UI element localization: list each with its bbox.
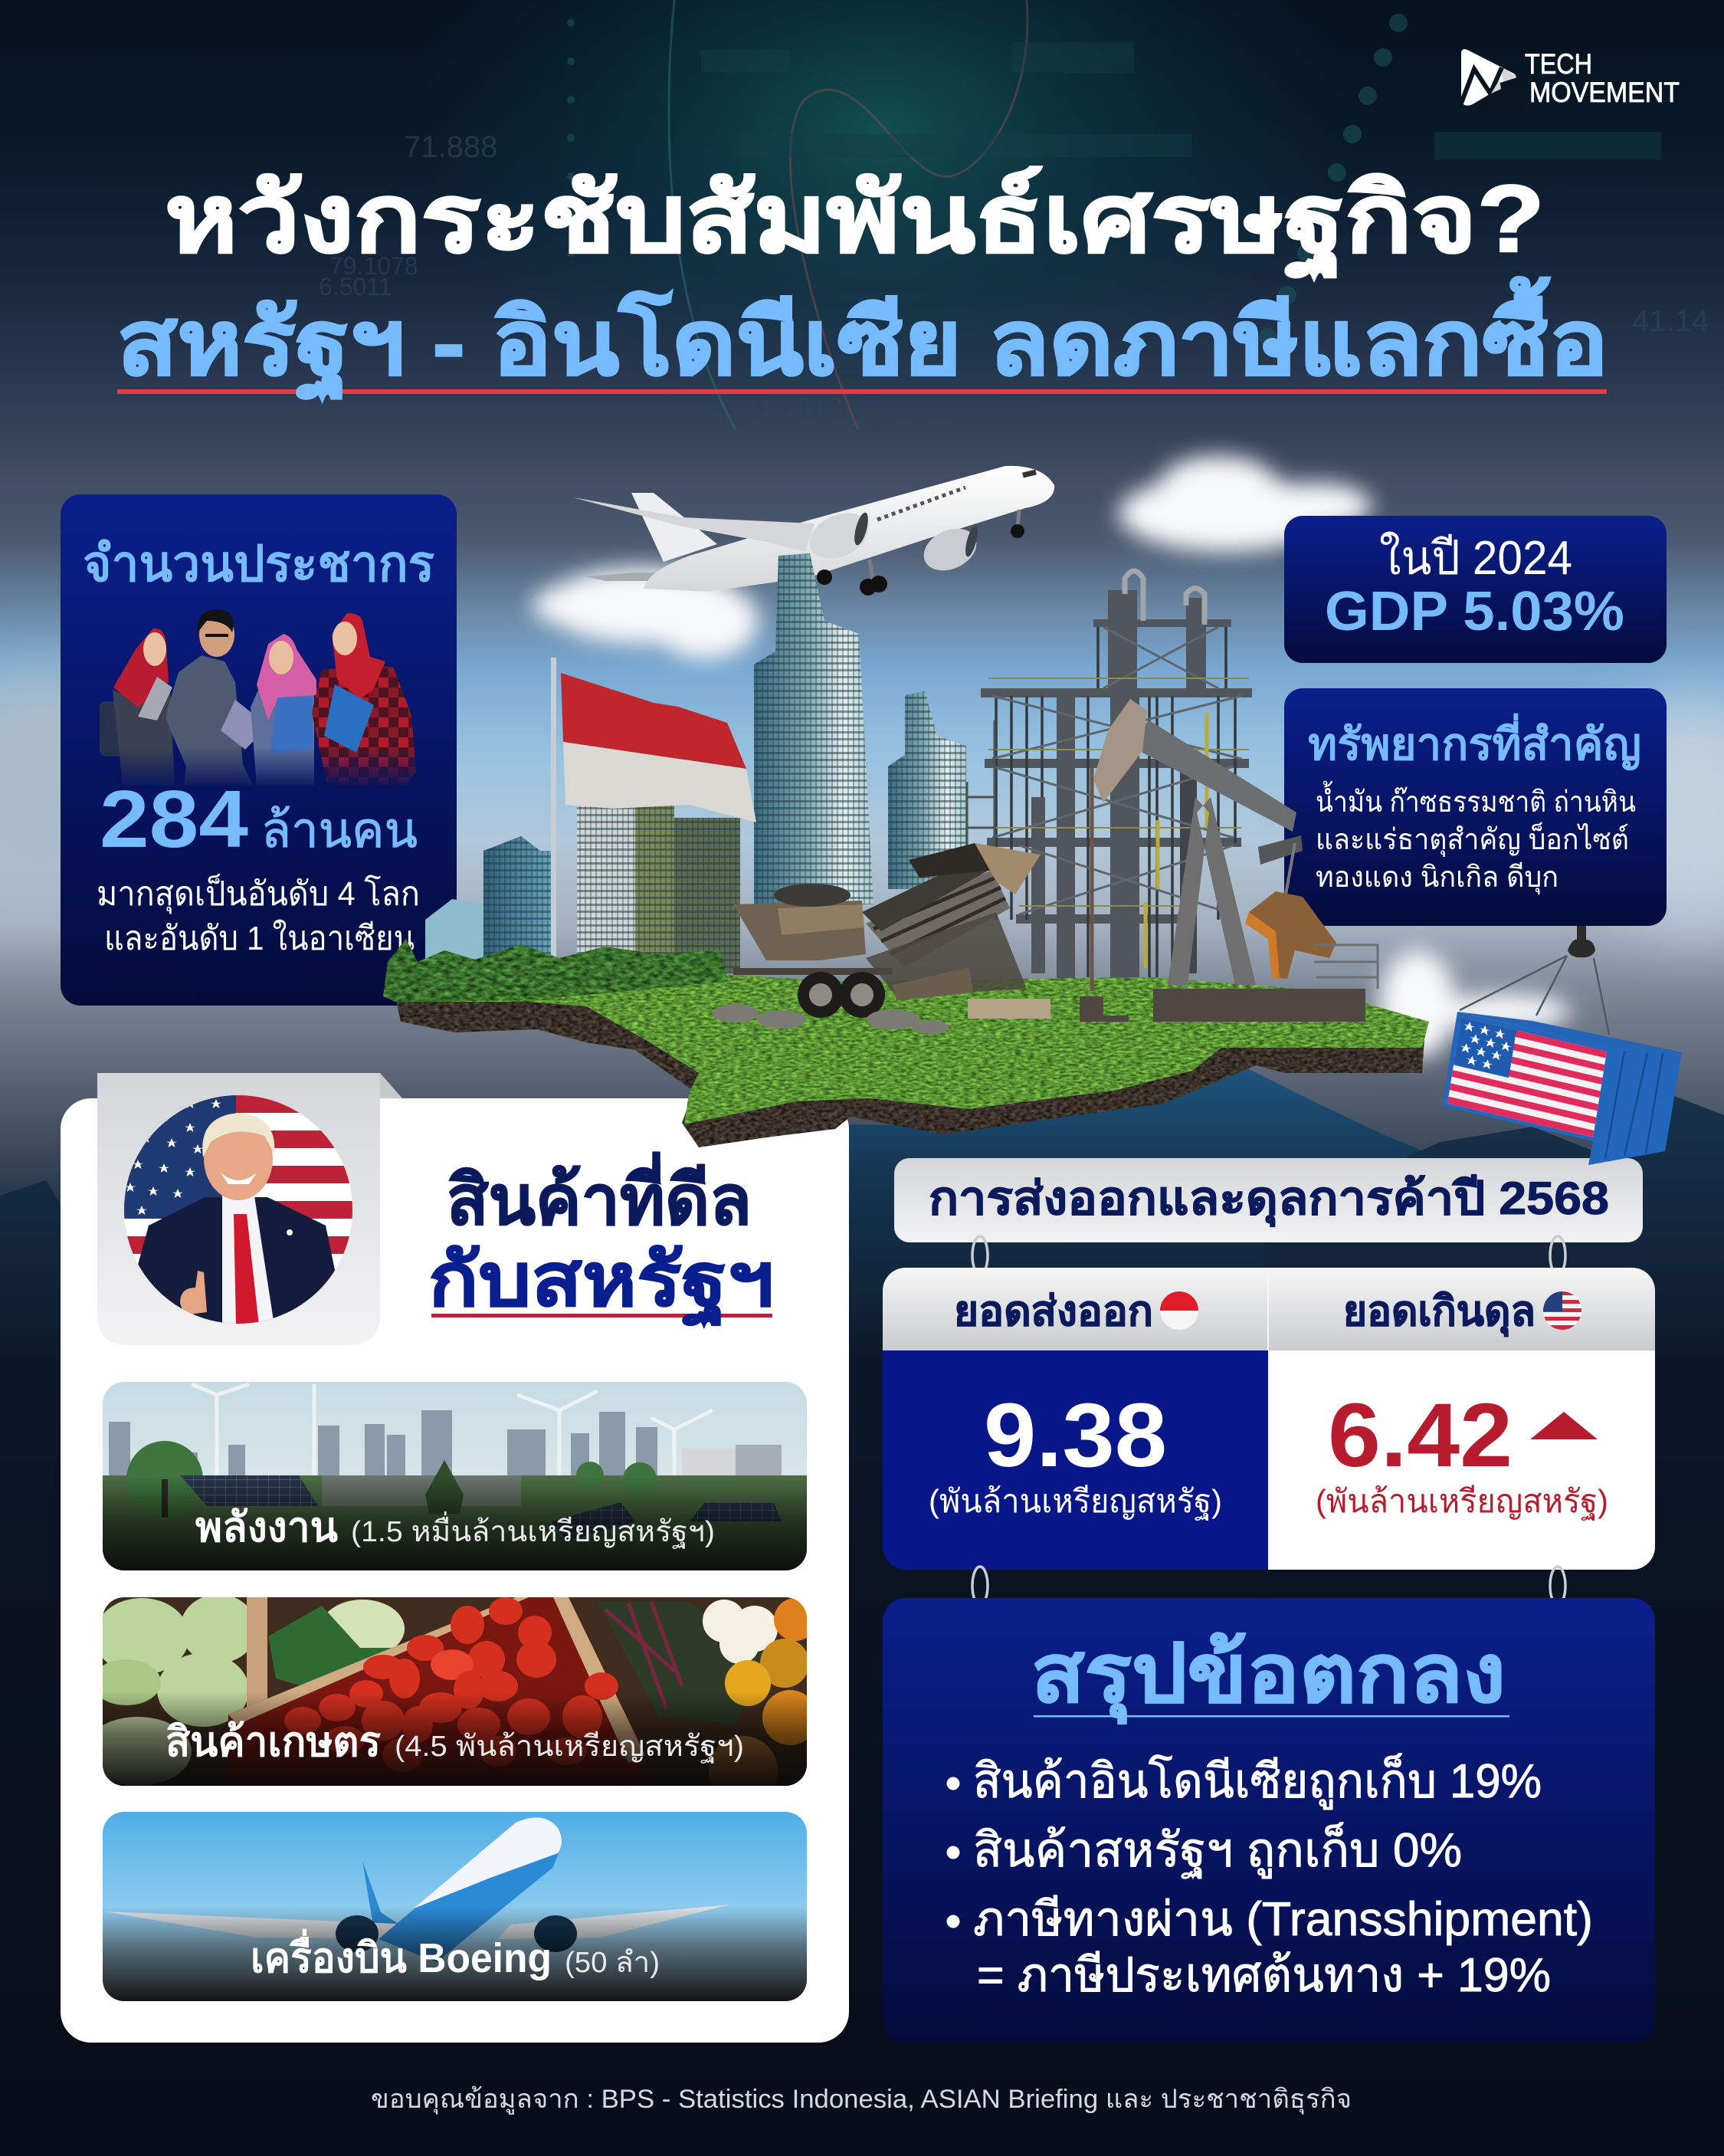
logo: Tech Movement: MOVEMENT [1529, 77, 1680, 108]
card: Boeing aircraft [103, 1812, 807, 2001]
column: trade surplus [1316, 1288, 1608, 1521]
logo: Tech Movement [1460, 48, 1680, 111]
heading: population: จำนวนประชากร [83, 535, 434, 592]
panel: export and trade balance header: การส่งออกและดุลการค้าปี 2568 [929, 1173, 1609, 1227]
panel: key resources: ทรัพยากรที่สำคัญ [1308, 713, 1641, 770]
heading: deal products [428, 1152, 774, 1328]
headline line 2: สหรัฐฯ - อินโดนีเซีย ลดภาษีแลกซื้อ [117, 277, 1608, 402]
panel: key resources: ทองแดง นิกเกิล ดีบุก [1316, 861, 1558, 894]
description: มากสุดเป็นอันดับ 4 โลก [97, 874, 420, 914]
card: Boeing aircraft: เครื่องบิน Boeing [251, 1928, 552, 1981]
card: agricultural products: สินค้าเกษตร [166, 1719, 381, 1765]
portrait: flag and figure [124, 1095, 352, 1326]
background: sky, glow and mountains: 6.5011 [319, 273, 392, 300]
stat: 284 million people: 284 [100, 774, 248, 865]
panel: deal products [61, 1073, 849, 2043]
hanging hooks [972, 1236, 1565, 1275]
background: sky, glow and mountains: 71.888 [404, 130, 497, 164]
crane hook [1568, 926, 1595, 957]
description: และอันดับ 1 ในอาเซียน [104, 919, 415, 957]
panel: export and trade balance header [894, 1158, 1643, 1242]
card: agricultural products: (4.5 พันล้านเหรียญสหรัฐฯ) [395, 1731, 744, 1764]
background: sky, glow and mountains: 41.14 [1632, 304, 1709, 338]
logo: Tech Movement: TECH [1525, 48, 1592, 80]
panel: key resources: น้ำมัน ก๊าซธรรมชาติ ถ่านหิน [1316, 780, 1636, 819]
portrait tab [97, 1073, 402, 1345]
column: exports: 9.38 [984, 1385, 1167, 1486]
heading: deal products: สินค้าที่ดีล [447, 1152, 752, 1239]
mining truck [713, 843, 1050, 1034]
panel: GDP: GDP 5.03% [1325, 581, 1624, 642]
heading: deal summary: สรุปข้อตกลง [1031, 1629, 1506, 1724]
card: energy: พลังงาน [195, 1505, 338, 1551]
icon: US flag [1543, 1291, 1581, 1330]
illustration: Indonesian city, industry and island [383, 466, 1682, 1165]
stat: 284 million people [100, 774, 418, 865]
bullet list: ภาษีทางผ่าน (Transshipment) [973, 1893, 1593, 1946]
panel: key resources [1284, 688, 1667, 926]
heading: deal products: กับสหรัฐฯ [428, 1239, 774, 1328]
arrow: up [1530, 1412, 1598, 1439]
column: exports [929, 1288, 1222, 1521]
description [97, 874, 420, 957]
table: exports and surplus [883, 1268, 1655, 1570]
photo: students [96, 609, 421, 789]
headline line 1: หวังกระชับสัมพันธ์เศรษฐกิจ? [165, 166, 1545, 281]
buildings [425, 553, 966, 985]
icon: Indonesia flag [1160, 1291, 1198, 1330]
card: energy [103, 1382, 807, 1570]
Indonesian flag [551, 658, 756, 987]
bullet list [947, 1753, 1593, 2002]
card: Boeing aircraft: (50 ลำ) [565, 1947, 660, 1979]
footer: sources: ขอบคุณข้อมูลจาก : BPS - Statistics Indonesia, ASIAN Briefing และ ประชาชาติธุรกิจ [371, 2085, 1352, 2115]
airplane [573, 466, 1054, 596]
oil pump [1080, 699, 1378, 1022]
shipping container with US flag [1442, 956, 1682, 1165]
background: sky, glow and mountains: 41.1613 [743, 392, 843, 424]
bullet list: สินค้าอินโดนีเซียถูกเก็บ 19% [973, 1753, 1542, 1810]
column: trade surplus: ยอดเกินดุล [1343, 1288, 1536, 1337]
floating island [383, 939, 1429, 1147]
column: trade surplus: (พันล้านเหรียญสหรัฐ) [1316, 1483, 1608, 1521]
panel: GDP: ในปี 2024 [1379, 531, 1572, 585]
bullet list: = ภาษีประเทศต้นทาง + 19% [977, 1949, 1551, 2002]
card: energy: (1.5 หมื่นล้านเหรียญสหรัฐฯ) [351, 1511, 715, 1549]
refinery [967, 571, 1252, 980]
title [117, 166, 1608, 402]
column: exports: ยอดส่งออก [954, 1288, 1153, 1334]
bullet list: สินค้าสหรัฐฯ ถูกเก็บ 0% [973, 1822, 1462, 1879]
panel: deal summary [883, 1598, 1655, 2043]
column: exports: (พันล้านเหรียญสหรัฐ) [929, 1483, 1222, 1521]
red underline [117, 389, 1607, 394]
panel: key resources: และแร่ธาตุสำคัญ บ็อกไซต์ [1316, 822, 1629, 857]
panel: GDP [1284, 516, 1667, 663]
clouds [533, 456, 1571, 1058]
hanging hooks lower [972, 1567, 1565, 1605]
background: sky, glow and mountains: 79.1078 [329, 252, 418, 280]
stat: 284 million people: ล้านคน [261, 802, 418, 858]
column: trade surplus: 6.42 [1328, 1385, 1513, 1486]
panel: population [61, 494, 457, 1006]
card: agricultural products [103, 1597, 807, 1786]
